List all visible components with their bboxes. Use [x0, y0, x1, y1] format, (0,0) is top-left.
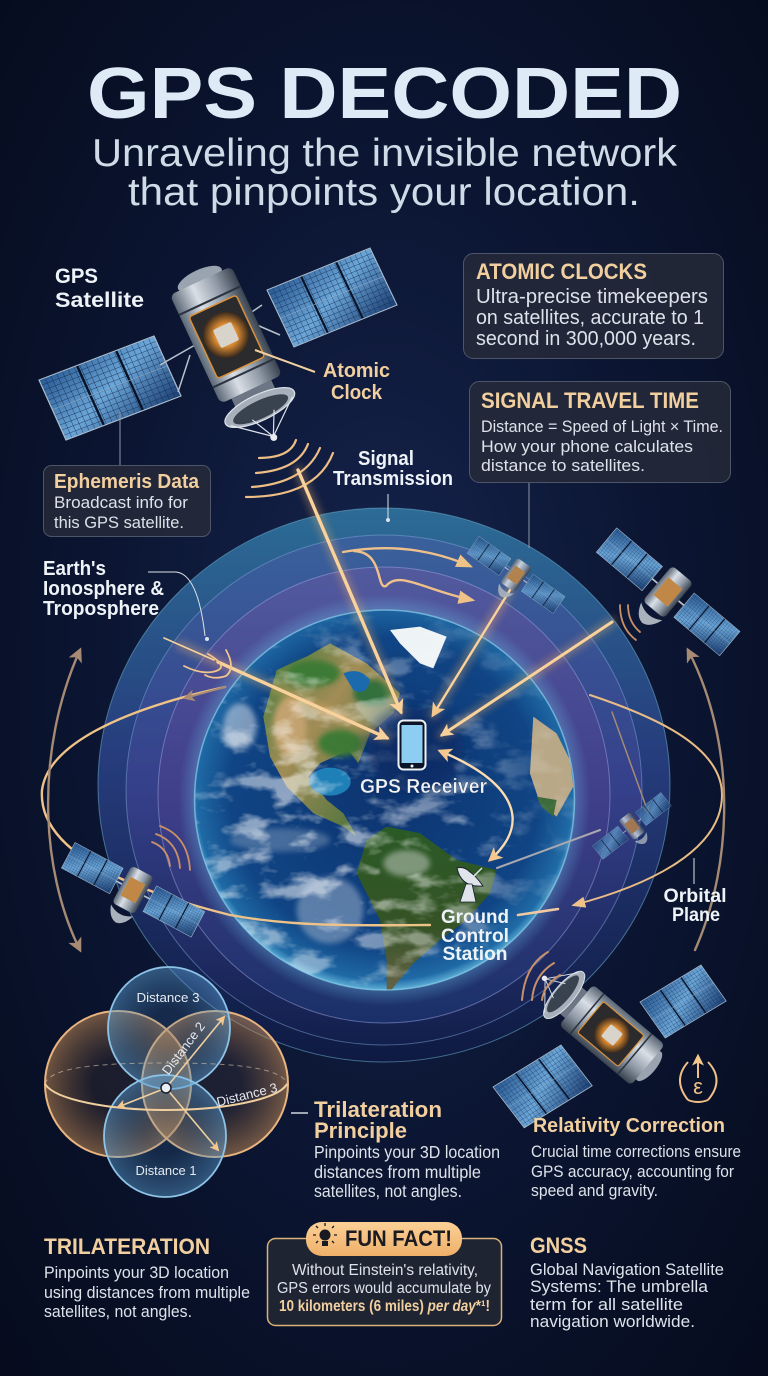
- panel: fun fact: FUN FACT!: [345, 1226, 452, 1251]
- panel: fun fact: 10 kilometers (6 miles) per day*¹!: [279, 1298, 490, 1315]
- signal waves: upper right satellite: [620, 605, 640, 640]
- north america vegetation: [273, 660, 393, 757]
- panel: trilateration principle: Principle: [314, 1118, 407, 1143]
- panel: trilateration principle: Pinpoints your 3D location: [314, 1142, 500, 1162]
- cloud masses: [223, 703, 363, 943]
- label: Atomic Clock: Atomic: [323, 360, 390, 382]
- panel: trilateration principle: Trilateration: [314, 1097, 442, 1122]
- panel: signal travel time: SIGNAL TRAVEL TIME: [481, 388, 699, 413]
- label: orbital plane: [664, 858, 726, 926]
- panel: signal travel time: distance to satellites.: [481, 456, 645, 475]
- satellite: right small: [590, 790, 680, 870]
- signal waves: left satellite: [152, 826, 190, 870]
- panel: trilateration principle: [291, 1097, 500, 1201]
- label: Atomic Clock: Clock: [331, 382, 383, 404]
- panel: atomic clocks: ATOMIC CLOCKS: [476, 259, 647, 284]
- atmosphere rings: [98, 508, 670, 1062]
- icon: relativity symbol: ε: [693, 1074, 703, 1099]
- label: ionosphere and troposphere: Earth's: [43, 558, 106, 580]
- panel: fun fact: GPS errors would accumulate by: [277, 1280, 491, 1297]
- label: ground control station: Station: [442, 944, 508, 965]
- panel: trilateration: TRILATERATION: [44, 1234, 210, 1259]
- label: ionosphere and troposphere: [43, 558, 209, 641]
- panel: ephemeris data: this GPS satellite.: [54, 513, 184, 532]
- panel: trilateration: satellites, not angles.: [44, 1302, 192, 1321]
- panel: fun fact: Without Einstein's relativity,: [292, 1262, 478, 1279]
- panel: GNSS: [530, 1233, 724, 1331]
- subtitle: that pinpoints your location.: [128, 171, 640, 214]
- panel: atomic clocks: on satellites, accurate to 1: [476, 307, 704, 329]
- satellite: upper right: [580, 523, 744, 675]
- label: ionosphere and troposphere: Troposphere: [43, 598, 159, 620]
- panel: atomic clocks: second in 300,000 years.: [476, 328, 696, 350]
- panel: trilateration: [44, 1234, 250, 1321]
- gulf water: [309, 768, 351, 796]
- panel: ephemeris data: [44, 412, 210, 536]
- label: GPS receiver: GPS Receiver: [360, 776, 487, 798]
- label: ionosphere and troposphere: Ionosphere &: [43, 578, 164, 600]
- hudson bay: [343, 671, 370, 692]
- signal waves: lower right satellite: [522, 952, 560, 1000]
- panel: GNSS: GNSS: [530, 1233, 587, 1258]
- subtitle: Unraveling the invisible network: [92, 132, 678, 175]
- satellite: lower right: [493, 954, 726, 1128]
- label: GPS Satellite: [55, 265, 144, 312]
- panel: trilateration principle: satellites, not angles.: [314, 1181, 462, 1201]
- earth globe: [178, 594, 590, 1006]
- label: ground control station: Control: [441, 926, 509, 947]
- chart: trilateration spheres: Distance 3: [215, 1080, 279, 1109]
- panel: relativity correction: speed and gravity.: [531, 1181, 658, 1200]
- fun fact badge: [306, 1222, 462, 1256]
- panel: trilateration: Pinpoints your 3D location: [44, 1263, 229, 1282]
- cloud texture: [190, 605, 580, 995]
- panel: relativity correction: GPS accuracy, accounting for: [531, 1162, 734, 1181]
- amazon highlight: [383, 850, 430, 877]
- north america: [263, 643, 400, 837]
- panel: GNSS: navigation worldwide.: [530, 1313, 695, 1331]
- chart: trilateration spheres: Distance 1: [136, 1163, 196, 1178]
- panel: signal travel time: How your phone calculates: [481, 437, 693, 456]
- label: signal transmission: [333, 448, 453, 522]
- satellite: left: [51, 837, 208, 957]
- orbital paths: [42, 650, 724, 950]
- receiver dark ocean: [367, 708, 463, 792]
- panel: relativity correction: [531, 1115, 741, 1200]
- satellite: GPS satellite main: [39, 248, 397, 457]
- africa: [530, 717, 573, 817]
- panel: relativity correction: Relativity Correction: [533, 1115, 725, 1137]
- panel: relativity correction: Crucial time corrections ensure: [531, 1142, 741, 1161]
- label: signal transmission: Transmission: [333, 468, 453, 490]
- subtitle: [92, 132, 678, 214]
- panel: fun fact: [268, 1222, 502, 1326]
- greenland: [390, 627, 447, 668]
- panel: ephemeris data: Ephemeris Data: [54, 471, 200, 493]
- panel: trilateration principle: distances from multiple: [314, 1162, 481, 1182]
- icon: ground station dish: [457, 868, 483, 902]
- title: GPS DECODED: [87, 54, 682, 134]
- panel: atomic clocks: Ultra-precise timekeepers: [476, 286, 708, 308]
- icon: light bulb: [313, 1223, 337, 1246]
- panel: signal travel time: [470, 382, 730, 548]
- label: ground control station: [441, 907, 509, 965]
- panel: atomic clocks: [464, 254, 724, 358]
- signal waves: main satellite: [246, 440, 333, 497]
- chart: trilateration spheres: Distance 3: [136, 990, 200, 1005]
- label: ground control station: Ground: [441, 907, 509, 928]
- panel: GNSS: term for all satellite: [530, 1296, 683, 1314]
- icon: relativity symbol: [680, 1056, 716, 1102]
- label: orbital plane: Plane: [672, 905, 720, 926]
- panel: GNSS: Systems: The umbrella: [530, 1278, 709, 1296]
- panel: trilateration: using distances from multiple: [44, 1283, 250, 1302]
- panel: ephemeris data: Broadcast info for: [54, 493, 188, 512]
- south america: [357, 827, 497, 997]
- satellite: upper middle: [458, 533, 568, 627]
- panel: GNSS: Global Navigation Satellite: [530, 1261, 724, 1279]
- label: GPS Satellite: Satellite: [55, 289, 144, 312]
- label: signal transmission: Signal: [358, 448, 414, 470]
- chart: trilateration spheres: [45, 967, 288, 1197]
- signal beams to receiver: [164, 470, 612, 860]
- icon: phone receiver: [398, 720, 426, 770]
- label: GPS Satellite: GPS: [55, 265, 98, 288]
- curved signal arrows: [343, 548, 472, 600]
- label: Atomic Clock: [255, 350, 390, 404]
- chart: trilateration spheres: Distance 2: [159, 1019, 208, 1078]
- panel: signal travel time: Distance = Speed of Light × Time.: [481, 417, 723, 436]
- label: orbital plane: Orbital: [664, 886, 726, 907]
